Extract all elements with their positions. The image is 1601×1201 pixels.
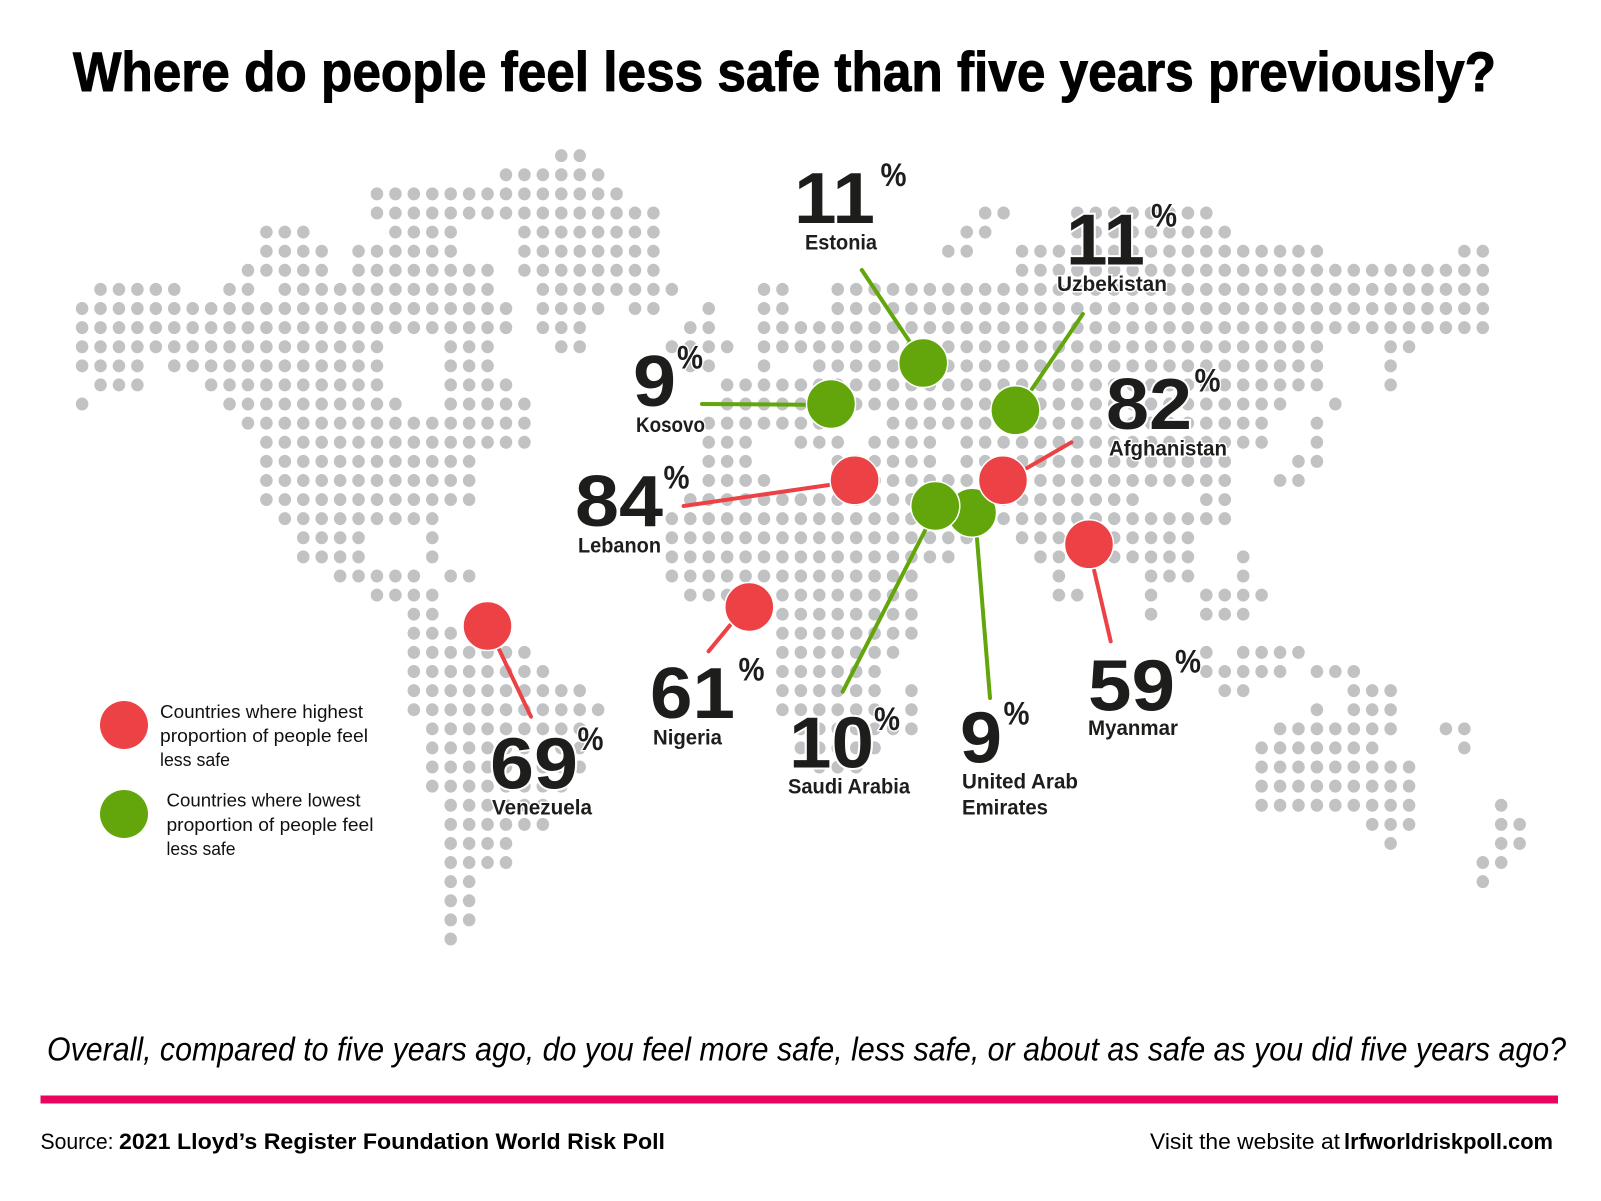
- callout: Estonia 11%: Estonia: [805, 231, 877, 254]
- callout: United Arab Emirates 9%: [948, 488, 1078, 819]
- callout: Estonia 11%: 11: [794, 159, 875, 239]
- callout: Nigeria 61%: Nigeria: [653, 726, 722, 749]
- callout: Lebanon 84%: [575, 456, 879, 558]
- callout: United Arab Emirates 9%: Emirates: [962, 796, 1048, 819]
- callout: Saudi Arabia 10%: [788, 482, 960, 799]
- callout: Kosovo 9%: 9: [633, 342, 676, 422]
- callout: Uzbekistan 11%: %: [1151, 198, 1177, 234]
- callout: Afghanistan 82%: 82: [1106, 365, 1192, 445]
- callout: United Arab Emirates 9%: 9: [960, 698, 1002, 778]
- callout: Lebanon 84%: %: [664, 460, 690, 496]
- callout: Uzbekistan 11%: 11: [1066, 200, 1145, 280]
- title: Where do people feel less safe than five years previously?: [73, 40, 1496, 103]
- callout: Uzbekistan 11%: [991, 198, 1177, 435]
- callout: Estonia 11%: %: [880, 157, 906, 193]
- website link: [1150, 1129, 1553, 1154]
- callout: Venezuela 69%: 69: [490, 724, 578, 804]
- legend text: highest: proportion of people feel: [160, 725, 368, 746]
- callout: Kosovo 9%: %: [677, 340, 703, 376]
- legend text: highest: less safe: [160, 749, 230, 770]
- callout: Lebanon 84%: Lebanon: [578, 535, 661, 558]
- callout: Lebanon 84%: 84: [575, 462, 663, 542]
- callout: Myanmar 59%: 59: [1088, 647, 1175, 727]
- legend swatch: highest: [100, 701, 148, 749]
- callout: Myanmar 59%: Myanmar: [1088, 717, 1178, 740]
- dotted world map: [82, 156, 1520, 939]
- legend swatch: lowest: [100, 790, 148, 838]
- callout: Estonia 11%: [794, 157, 948, 388]
- callout: Venezuela 69%: %: [578, 721, 604, 757]
- callout: United Arab Emirates 9%: United Arab: [962, 770, 1078, 793]
- callout: Kosovo 9%: [633, 340, 856, 437]
- source: Source:: [40, 1129, 114, 1154]
- source: 2021 Lloyd’s Register Foundation World Risk Poll: [119, 1129, 665, 1154]
- callout: United Arab Emirates 9%: %: [1004, 696, 1030, 732]
- callout: Venezuela 69%: [463, 602, 604, 820]
- callout: Saudi Arabia 10%: %: [874, 701, 900, 737]
- callout: Nigeria 61%: %: [738, 652, 764, 688]
- legend text: lowest: [166, 790, 374, 859]
- callout: Uzbekistan 11%: Uzbekistan: [1057, 273, 1167, 296]
- callout: Afghanistan 82%: %: [1194, 362, 1220, 398]
- legend text: highest: [160, 701, 368, 770]
- website link: Visit the website at: [1150, 1129, 1340, 1154]
- callout: Nigeria 61%: 61: [650, 654, 735, 734]
- callout: Saudi Arabia 10%: Saudi Arabia: [788, 776, 910, 799]
- legend text: highest: Countries where highest: [160, 701, 363, 722]
- legend text: lowest: less safe: [166, 838, 236, 859]
- callout: Afghanistan 82%: [978, 362, 1227, 505]
- website link: lrfworldriskpoll.com: [1344, 1129, 1553, 1154]
- callout: Saudi Arabia 10%: 10: [789, 703, 874, 783]
- callout: Afghanistan 82%: Afghanistan: [1109, 438, 1227, 461]
- callout: Venezuela 69%: Venezuela: [492, 797, 592, 820]
- callout: Myanmar 59%: %: [1175, 644, 1201, 680]
- legend text: lowest: Countries where lowest: [166, 790, 360, 811]
- callout: Myanmar 59%: [1064, 520, 1201, 740]
- callout: Nigeria 61%: [650, 582, 774, 749]
- callout: Kosovo 9%: Kosovo: [636, 414, 705, 437]
- legend: [100, 701, 374, 859]
- legend text: lowest: proportion of people feel: [166, 814, 374, 835]
